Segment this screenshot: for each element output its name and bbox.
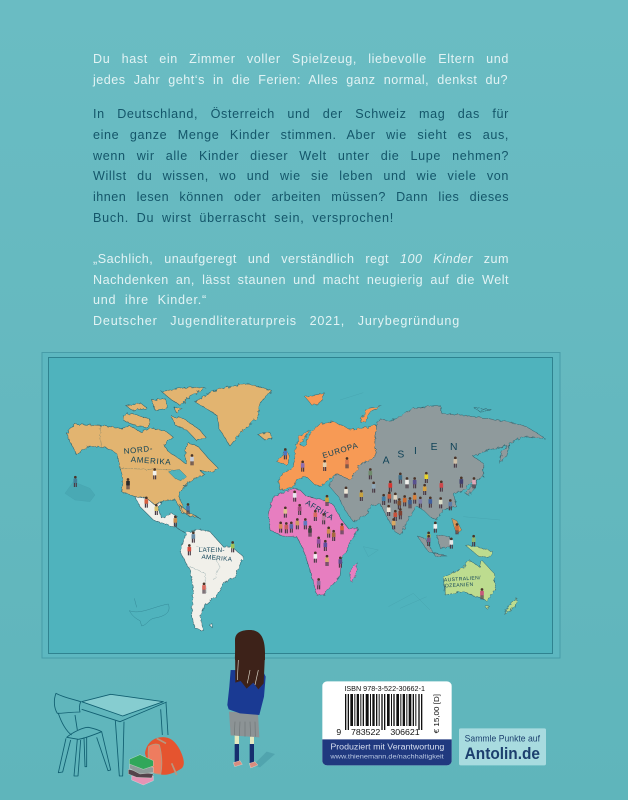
- label: Asien: S: [397, 449, 404, 460]
- whale drawing: South Pacific: [129, 598, 169, 626]
- barcode label: www.thienemann.de/nachhaltigkeit: [329, 753, 444, 760]
- main text: wenn wir alle Kinder dieser Welt unter die Lupe nehmen?: [93, 149, 509, 163]
- desk and chair: [54, 693, 168, 776]
- jury quote: „Sachlich, unaufgeregt und verständlich regt 100 Kinder zum: [93, 252, 509, 266]
- label: Asien: I: [414, 446, 417, 457]
- intro text: jedes Jahr geht‘s in die Ferien: Alles ganz normal, denkst du?: [93, 73, 508, 87]
- continent: Latin America: [135, 497, 243, 631]
- continent: Asia: [328, 405, 545, 556]
- jury quote: [93, 252, 509, 328]
- label: Latein-Amerika: LATEIN-: [199, 547, 225, 554]
- faint sea islands: [340, 393, 500, 610]
- shadow: [253, 752, 275, 767]
- label: Nord-Amerika: NORD-: [123, 444, 154, 456]
- label: Asien: N: [450, 442, 457, 453]
- jury quote: Deutscher Jugendliteraturpreis 2021, Jurybegründung: [93, 314, 460, 328]
- girl looking at the map: [227, 630, 275, 768]
- whale drawing: Pacific: [65, 482, 95, 502]
- girl's hair top over the map: [235, 635, 265, 660]
- label panel: [322, 681, 452, 765]
- responsibility text: Produziert mit Verantwortung: [330, 742, 444, 751]
- barcode label: [322, 681, 452, 765]
- label: Asien: A: [383, 455, 390, 466]
- stack of books: [128, 755, 153, 785]
- jury quote: Nachdenken an, lässt staunen und macht neugierig auf die Welt: [93, 273, 509, 287]
- jacket: [227, 670, 266, 715]
- children on the map: [73, 448, 484, 599]
- main text: Buch. Du wirst überrascht sein, versprochen!: [93, 211, 394, 225]
- label: Asien: [383, 442, 457, 466]
- continent labels: [123, 441, 481, 589]
- main text: In Deutschland, Österreich und der Schweiz mag das für: [93, 107, 509, 121]
- backpack and books: [128, 737, 184, 785]
- world map: [65, 383, 545, 631]
- Antolin badge: [459, 728, 546, 765]
- label: Asien: E: [431, 442, 438, 453]
- island: Philippines: [452, 518, 462, 534]
- label: Afrika: AFRIKA: [304, 498, 336, 523]
- barcode label: 783522: [351, 727, 381, 737]
- barcode label: 306621: [390, 727, 420, 737]
- price: € 15,00 [D]: [434, 694, 441, 733]
- hair: [235, 630, 265, 689]
- label: Australien / Ozeanien: OZEANIEN: [445, 582, 474, 589]
- label: Nord-Amerika: AMERIKA: [131, 455, 172, 467]
- Antolin badge: Sammle Punkte auf: [465, 734, 540, 744]
- skirt: [229, 712, 259, 737]
- continent: Australia and Oceania: [443, 545, 517, 614]
- label: Australien / Ozeanien: AUSTRALIEN/: [444, 575, 481, 584]
- continent: North America: [67, 383, 272, 518]
- jury quote: und ihre Kinder.“: [93, 293, 207, 307]
- backpack: [145, 737, 184, 775]
- label: Latein-Amerika: AMERIKA: [201, 554, 233, 563]
- main text: Willst du wissen, wo und wie sie leben und wie viele von: [93, 169, 509, 183]
- chair: [54, 693, 111, 776]
- world map frame: [42, 352, 560, 658]
- main text: ihnen lesen können oder arbeiten müssen? Dann lies dieses: [93, 190, 509, 204]
- continent: Africa: [268, 488, 358, 595]
- barcode bars: [345, 694, 422, 730]
- legs and socks: [233, 735, 258, 768]
- label: Europa: EUROPA: [321, 441, 359, 460]
- label: Latein-Amerika: [199, 547, 233, 563]
- ISBN: ISBN 978-3-522-30662-1: [344, 684, 425, 693]
- intro text: [92, 52, 509, 87]
- continent: Europe: [277, 393, 382, 490]
- blue band: [322, 739, 452, 765]
- label: Australien / Ozeanien: [444, 575, 481, 589]
- desk: [82, 694, 168, 776]
- main text: eine ganze Menge Kinder stimmen. Aber wie sieht es aus,: [93, 128, 509, 142]
- main text: [93, 107, 509, 225]
- barcode digits: 9: [336, 727, 341, 737]
- Antolin badge: Antolin.de: [465, 744, 540, 763]
- label: Nord-Amerika: [123, 444, 172, 467]
- intro text: Du hast ein Zimmer voller Spielzeug, liebevolle Eltern und: [93, 52, 509, 66]
